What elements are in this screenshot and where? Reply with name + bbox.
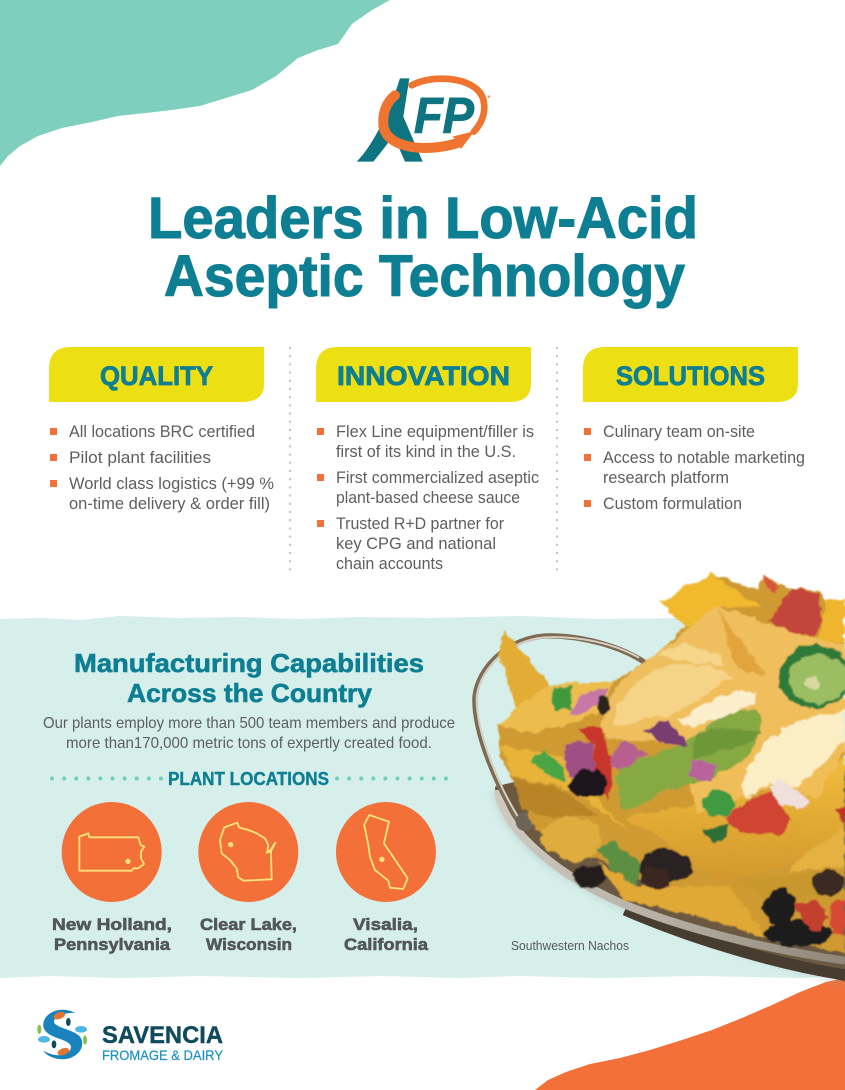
location icon: Pennsylvania xyxy=(62,802,162,902)
column dividers xyxy=(290,348,557,575)
location label: Visalia xyxy=(344,915,429,954)
quality bullets: Pilot plant facilities xyxy=(69,448,211,467)
plant locations dotted rule xyxy=(52,776,449,780)
innovation bullets: key CPG and national xyxy=(336,534,496,553)
location label: Clear Lake: Clear Lake, xyxy=(200,915,297,934)
innovation bullets: Flex Line equipment/filler is xyxy=(336,422,534,441)
background shape: bottom-right orange brush xyxy=(535,978,845,1090)
tomatoes xyxy=(578,727,613,800)
section heading: Across the Country xyxy=(127,678,373,708)
quality bullets: All locations BRC certified xyxy=(69,422,255,441)
logo letters FP: FP xyxy=(414,88,475,144)
innovation bullets: first of its kind in the U.S. xyxy=(336,442,516,461)
Savencia wordmark: SAVENCIA xyxy=(102,1022,223,1049)
panel: solutions xyxy=(583,347,805,513)
innovation bullets: chain accounts xyxy=(336,554,443,573)
photo caption: Southwestern Nachos xyxy=(511,938,629,953)
plant locations heading: PLANT LOCATIONS xyxy=(168,769,329,789)
location label: New Holland: Pennsylvania xyxy=(54,935,171,954)
quality bullets xyxy=(50,422,274,513)
tomato top xyxy=(770,587,822,637)
section heading: Manufacturing Capabilities xyxy=(74,648,424,678)
location icon: Wisconsin xyxy=(198,802,298,902)
innovation heading: INNOVATION xyxy=(337,361,510,391)
Savencia S mark xyxy=(37,1010,87,1059)
solutions bullets xyxy=(584,422,805,513)
solutions bullets: Custom formulation xyxy=(603,494,742,513)
solutions bullets: Access to notable marketing xyxy=(603,448,805,467)
section description: Our plants employ more than 500 team members and produce xyxy=(43,715,455,732)
peppers xyxy=(553,687,572,711)
logo: AFP xyxy=(357,78,490,162)
chips xyxy=(498,574,845,953)
background shape: top-left teal brush xyxy=(0,0,390,166)
location label: New Holland xyxy=(52,915,172,954)
photo: southwestern nachos xyxy=(475,574,845,985)
guacamole xyxy=(615,710,760,812)
Savencia sub-brand: FROMAGE & DAIRY xyxy=(102,1047,224,1063)
title: Aseptic Technology xyxy=(164,244,685,309)
location label: New Holland: New Holland, xyxy=(52,915,172,934)
plate shadow xyxy=(493,790,845,985)
panel: quality xyxy=(49,347,274,513)
solutions bullets: Culinary team on-site xyxy=(603,422,755,441)
quality bullets: on-time delivery & order fill) xyxy=(69,494,270,513)
plate xyxy=(495,770,845,982)
title xyxy=(148,186,698,309)
title: Leaders in Low-Acid xyxy=(148,186,698,251)
innovation bullets: plant-based cheese sauce xyxy=(336,488,520,507)
innovation bullets: Trusted R+D partner for xyxy=(336,514,504,533)
quality heading: QUALITY xyxy=(100,361,213,391)
beans xyxy=(569,769,608,797)
panel: innovation xyxy=(316,347,539,573)
location label: Visalia: Visalia, xyxy=(353,915,418,934)
section description xyxy=(43,715,455,752)
quality bullets: World class logistics (+99 % xyxy=(69,474,274,493)
solutions heading tab xyxy=(583,347,798,402)
logo orange arrow ring xyxy=(383,79,490,149)
innovation bullets: First commercialized aseptic xyxy=(336,468,539,487)
location label: Clear Lake xyxy=(200,915,297,954)
solutions bullets: research platform xyxy=(603,468,729,487)
plate handle xyxy=(475,636,645,831)
onions xyxy=(603,741,648,772)
lower tomatoes xyxy=(795,900,828,932)
logo letter A xyxy=(357,78,423,162)
section description: more than170,000 metric tons of expertly created food. xyxy=(66,735,432,752)
solutions heading: SOLUTIONS xyxy=(616,361,765,391)
panel: manufacturing background xyxy=(0,616,845,978)
cheese sauce xyxy=(602,607,845,813)
innovation heading tab xyxy=(316,347,531,402)
section heading xyxy=(74,648,424,708)
location icon: California xyxy=(336,802,436,902)
location label: Visalia: California xyxy=(344,935,429,954)
innovation bullets xyxy=(317,422,539,573)
quality heading tab xyxy=(49,347,264,402)
plate underside xyxy=(625,910,845,975)
plate rim xyxy=(498,790,845,961)
logo: Savencia xyxy=(37,1010,224,1063)
jalapeno xyxy=(778,645,845,708)
location label: Clear Lake: Wisconsin xyxy=(206,935,292,954)
